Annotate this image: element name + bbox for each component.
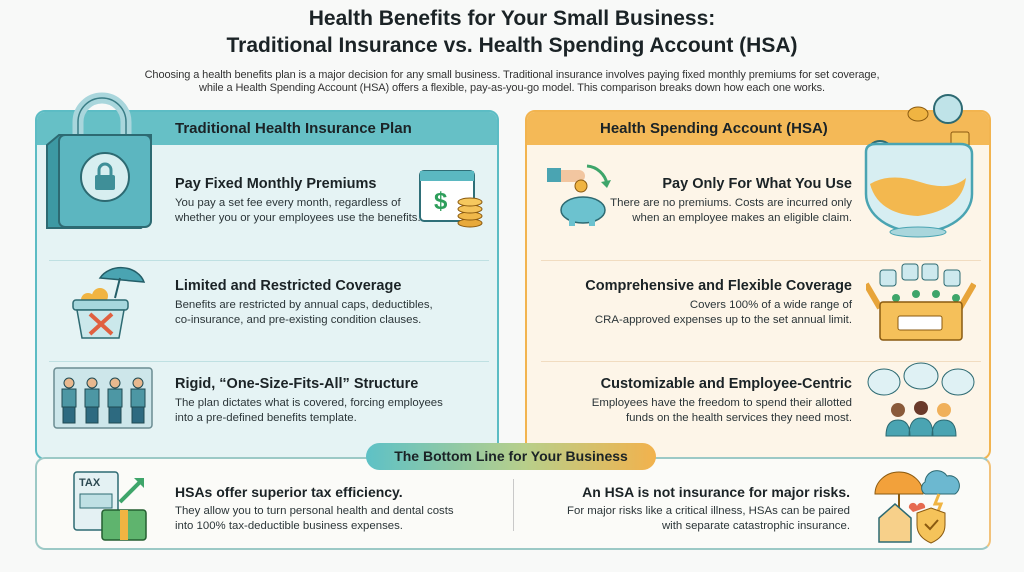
panel: bottom line	[35, 457, 991, 550]
title	[226, 7, 797, 57]
text: tax efficiency: HSAs offer superior tax efficiency.	[175, 484, 403, 500]
text: major risks: An HSA is not insurance for major risks.	[582, 484, 850, 500]
row: fixed premiums: whether you or your employees use the benefits.	[175, 212, 421, 224]
title: Health Benefits for Your Small Business:	[309, 7, 715, 30]
row: pay only for use: Pay Only For What You Use	[662, 176, 852, 192]
text: major risks: For major risks like a critical illness, HSAs can be paired	[567, 505, 850, 517]
row: limited coverage: co-insurance, and pre-existing condition clauses.	[175, 314, 421, 326]
row: rigid structure	[175, 376, 443, 424]
panel header	[37, 112, 501, 145]
row: customizable	[592, 376, 852, 424]
icon: umbrella house shield	[874, 470, 960, 544]
row: pay only for use: There are no premiums. Costs are incurred only	[610, 197, 852, 209]
heading pill: bottom line	[366, 443, 656, 470]
icon: employees thinking	[868, 362, 974, 436]
row: rigid structure: The plan dictates what is covered, forcing employees	[175, 397, 443, 409]
divider	[513, 479, 514, 531]
panel header: Health Spending Account (HSA)	[600, 120, 828, 137]
icon: basket umbrella	[72, 266, 146, 339]
text: major risks	[567, 484, 850, 532]
text: major risks: with separate catastrophic insurance.	[662, 520, 850, 532]
row: rigid structure: into a pre-defined benefits template.	[175, 412, 357, 424]
icon: employees	[53, 367, 153, 429]
row: fixed premiums: Pay Fixed Monthly Premiums	[175, 176, 376, 192]
text: tax efficiency: into 100% tax-deductible business expenses.	[175, 520, 403, 532]
row: customizable: Customizable and Employee-Centric	[601, 376, 852, 392]
icon: tax document with money	[73, 471, 147, 541]
row: pay only for use	[610, 176, 852, 224]
icon: piggy bank	[547, 164, 611, 226]
icon: jar of coins	[864, 94, 974, 238]
row: comprehensive coverage: Comprehensive and Flexible Coverage	[585, 278, 852, 294]
text: tax efficiency	[175, 484, 454, 532]
row: limited coverage	[175, 278, 433, 326]
row: limited coverage: Limited and Restricted Coverage	[175, 278, 401, 294]
row: rigid structure: Rigid, “One-Size-Fits-All” Structure	[175, 376, 418, 392]
row: pay only for use: when an employee makes an eligible claim.	[632, 212, 852, 224]
row: comprehensive coverage	[585, 278, 852, 326]
icon: padlock	[46, 92, 152, 229]
icon: calendar with coins: $	[434, 188, 448, 215]
row: limited coverage: Benefits are restricted by annual caps, deductibles,	[175, 299, 433, 311]
panel: traditional insurance	[35, 110, 499, 460]
row: fixed premiums	[175, 176, 421, 224]
row: customizable: Employees have the freedom to spend their allotted	[592, 397, 852, 409]
title: Traditional Insurance vs. Health Spending Account (HSA)	[227, 34, 797, 57]
icon: tax document with money: TAX	[79, 477, 101, 489]
row: customizable: funds on the health services they need most.	[626, 412, 852, 424]
panel header: Traditional Health Insurance Plan	[175, 120, 412, 137]
icon: calendar with coins	[419, 170, 482, 228]
panel: HSA	[525, 110, 991, 460]
text: tax efficiency: They allow you to turn personal health and dental costs	[175, 505, 454, 517]
row: comprehensive coverage: CRA-approved expenses up to the set annual limit.	[595, 314, 852, 326]
panel header	[527, 112, 993, 145]
intro text: Choosing a health benefits plan is a major decision for any small business. Traditional insurance involves paying fixed monthly premiums for set coverage, while a Health Spending Account (HSA) offers a flexible, pay-as-you-go model. This comparison breaks down how each one works.	[145, 69, 879, 94]
icon: box of benefits	[866, 264, 976, 341]
heading pill: bottom line: The Bottom Line for Your Business	[394, 448, 628, 464]
row: comprehensive coverage: Covers 100% of a wide range of	[690, 299, 852, 311]
row: fixed premiums: You pay a set fee every month, regardless of	[175, 197, 401, 209]
